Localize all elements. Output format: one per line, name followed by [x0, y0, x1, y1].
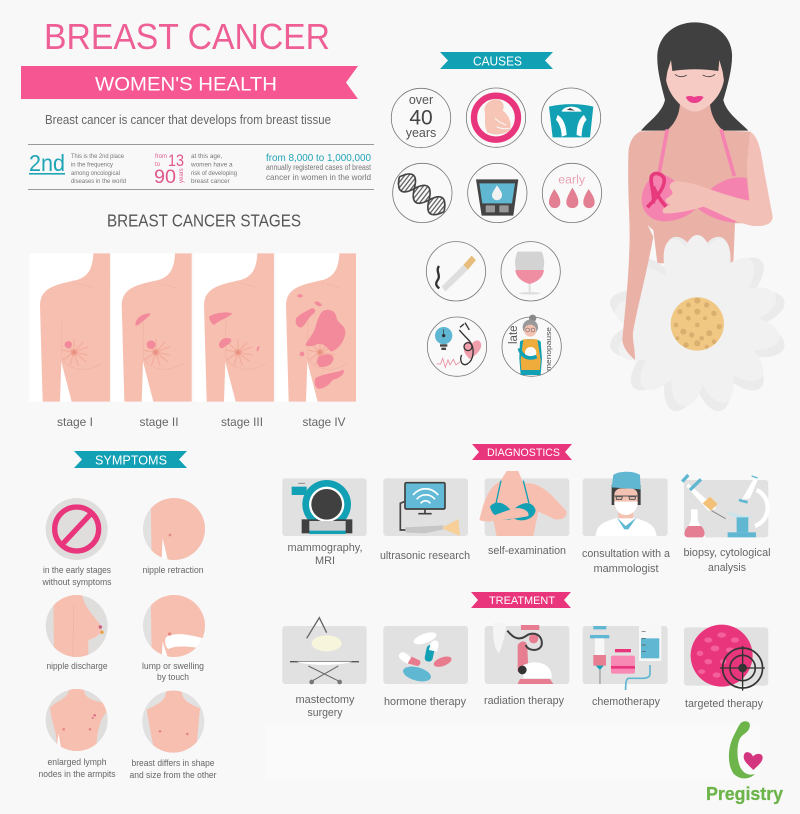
- treatment labels: [296, 694, 763, 719]
- torso: [640, 103, 763, 263]
- stage labels: stage III: [221, 415, 263, 429]
- heading: stages: BREAST CANCER STAGES: [107, 210, 301, 230]
- stat: from 13 to 90 years: from: [155, 154, 167, 160]
- icon: lump: [143, 592, 207, 658]
- stats strip: [28, 144, 374, 190]
- banner: women's health: WOMEN'S HEALTH: [95, 74, 277, 96]
- icon: blood pressure: [427, 317, 487, 376]
- stat: annual cases: annually registered cases of breast: [266, 163, 372, 172]
- stat: annual cases: from 8,000 to 1,000,000: [266, 152, 371, 164]
- stat: 2nd place: diseases in the world: [71, 178, 126, 185]
- straps: [659, 129, 734, 176]
- stat: from 13 to 90 years: risk of developing: [191, 170, 237, 177]
- stat: from 13 to 90 years: years: [179, 168, 185, 183]
- intro text: Breast cancer is cancer that develops from breast tissue: [45, 113, 331, 127]
- stage III: [193, 253, 274, 402]
- flower petals: [606, 233, 789, 415]
- icon: self examination: [479, 471, 569, 536]
- symptom labels: without symptoms: [42, 577, 112, 587]
- diagnostics labels: mammologist: [594, 563, 658, 575]
- diagnostics labels: mammography,: [288, 542, 362, 554]
- stage IV: [275, 253, 356, 402]
- panel: treatment: [282, 618, 768, 778]
- symptom labels: [38, 565, 216, 780]
- stage labels: stage II: [140, 415, 178, 429]
- panel: symptoms: [38, 495, 216, 780]
- icon: over 40 years: years: [406, 126, 436, 140]
- eyes and lips: [675, 74, 715, 103]
- title: BREAST CANCER: [44, 16, 330, 57]
- stage II: [111, 253, 192, 402]
- face: [666, 60, 724, 112]
- stat: from 13 to 90 years: 13: [168, 152, 184, 170]
- ribbon: treatment: [471, 592, 571, 608]
- icon: over 40 years: 40: [409, 106, 433, 130]
- symptom labels: nodes in the armpits: [38, 769, 116, 779]
- treatment labels: targeted therapy: [685, 698, 763, 710]
- icon: dna: [393, 163, 452, 223]
- icon: nipple retraction: [143, 495, 207, 562]
- treatment labels: surgery: [308, 707, 343, 719]
- stat: 2nd place: [29, 150, 126, 185]
- icon: lymph nodes: [46, 688, 108, 752]
- stage labels: stage I: [57, 415, 93, 429]
- stat: 2nd place: This is the 2nd place: [71, 153, 124, 160]
- treatment labels: chemotherapy: [592, 696, 660, 708]
- diagnostics labels: [288, 542, 770, 575]
- icon: scale: [541, 88, 601, 147]
- icon: fetus: [466, 88, 526, 147]
- stat: from 13 to 90 years: [154, 152, 237, 188]
- symptom labels: nipple retraction: [142, 565, 204, 575]
- panel: causes icons: late: [508, 325, 520, 344]
- ribbon: causes: [440, 52, 553, 69]
- symptom labels: enlarged lymph: [48, 757, 106, 767]
- ribbon: diagnostics: [472, 444, 572, 460]
- icon: over 40 years: [391, 88, 451, 148]
- symptom labels: in the early stages: [43, 565, 111, 575]
- ribbon: [647, 173, 666, 207]
- diagnostics labels: analysis: [708, 562, 746, 574]
- far arm and hand: [663, 132, 773, 226]
- ribbon: causes: CAUSES: [473, 54, 522, 68]
- flower centre: [671, 297, 724, 351]
- stage labels: [57, 415, 346, 429]
- diagnostics labels: ultrasonic research: [380, 550, 470, 562]
- icon: no symptoms: [46, 498, 108, 560]
- stat: from 13 to 90 years: women have a: [190, 162, 233, 168]
- stage I: [29, 253, 110, 402]
- icon: radiation machine: [485, 623, 569, 684]
- symptom labels: by touch: [157, 672, 189, 682]
- icon: early menstruation: [542, 163, 602, 223]
- ribbon: treatment: TREATMENT: [489, 595, 555, 607]
- ribbon: symptoms: [74, 451, 187, 468]
- banner: women's health: [21, 66, 358, 99]
- diagnostics labels: MRI: [315, 555, 335, 567]
- treatment labels: radiation therapy: [484, 695, 564, 707]
- icon: mri: [282, 478, 367, 536]
- logo mark: [729, 721, 763, 778]
- diagnostics labels: self-examination: [488, 545, 566, 557]
- icon: cigarette: [426, 242, 486, 301]
- icon: biopsy: [682, 475, 768, 537]
- panel: stages: [29, 253, 356, 402]
- panel: causes icons: menopause: [544, 327, 553, 371]
- icon: asymmetric breast: [142, 690, 204, 753]
- icon: mastectomy: [282, 618, 367, 684]
- stat: annual cases: cancer in women in the world: [266, 172, 371, 182]
- icon: mammologist: [583, 472, 668, 536]
- near arm: [622, 131, 653, 360]
- stat: 2nd place: in the frequency: [71, 162, 114, 168]
- ribbon: diagnostics: DIAGNOSTICS: [487, 447, 560, 459]
- icon: over 40 years: over: [409, 93, 433, 107]
- fringe: [663, 52, 727, 81]
- symptom labels: lump or swelling: [142, 661, 204, 671]
- stage labels: stage IV: [302, 415, 346, 429]
- stat: from 13 to 90 years: to: [155, 162, 161, 168]
- icon: wine glass: [501, 242, 560, 301]
- stat: annual cases: [266, 152, 372, 182]
- stat: 2nd place: among oncological: [71, 170, 120, 177]
- panel: causes icons: [391, 88, 602, 376]
- stat: from 13 to 90 years: at this age,: [191, 153, 222, 160]
- illustration: woman with daisy: [606, 22, 789, 415]
- diagnostics labels: consultation with a: [582, 548, 671, 560]
- stat: from 13 to 90 years: breast cancer: [191, 178, 231, 185]
- icon: ultrasound: [383, 478, 468, 536]
- ribbon: symptoms: SYMPTOMS: [95, 452, 167, 468]
- panel: diagnostics: [282, 471, 770, 575]
- treatment labels: hormone therapy: [384, 696, 466, 708]
- diagnostics labels: biopsy, cytological: [684, 547, 770, 559]
- symptom labels: nipple discharge: [46, 661, 108, 671]
- icon: late menopause: [502, 315, 561, 376]
- treatment labels: mastectomy: [296, 694, 355, 706]
- icon: chemotherapy: [583, 625, 668, 690]
- icon: targeted therapy: [684, 625, 768, 691]
- icon: hormone pills: [383, 626, 468, 684]
- symptom labels: breast differs in shape: [132, 758, 214, 768]
- stat: from 13 to 90 years: 90: [154, 167, 176, 188]
- logo wordmark: Pregistry: [706, 783, 784, 804]
- hair back: [641, 22, 748, 131]
- icon: glucose meter: [468, 163, 527, 223]
- stat: 2nd place: 2nd: [29, 150, 65, 176]
- icon: nipple discharge: [46, 592, 108, 658]
- symptom labels: and size from the other: [130, 770, 216, 780]
- icon: early menstruation: early: [558, 172, 586, 186]
- bra: [642, 174, 749, 223]
